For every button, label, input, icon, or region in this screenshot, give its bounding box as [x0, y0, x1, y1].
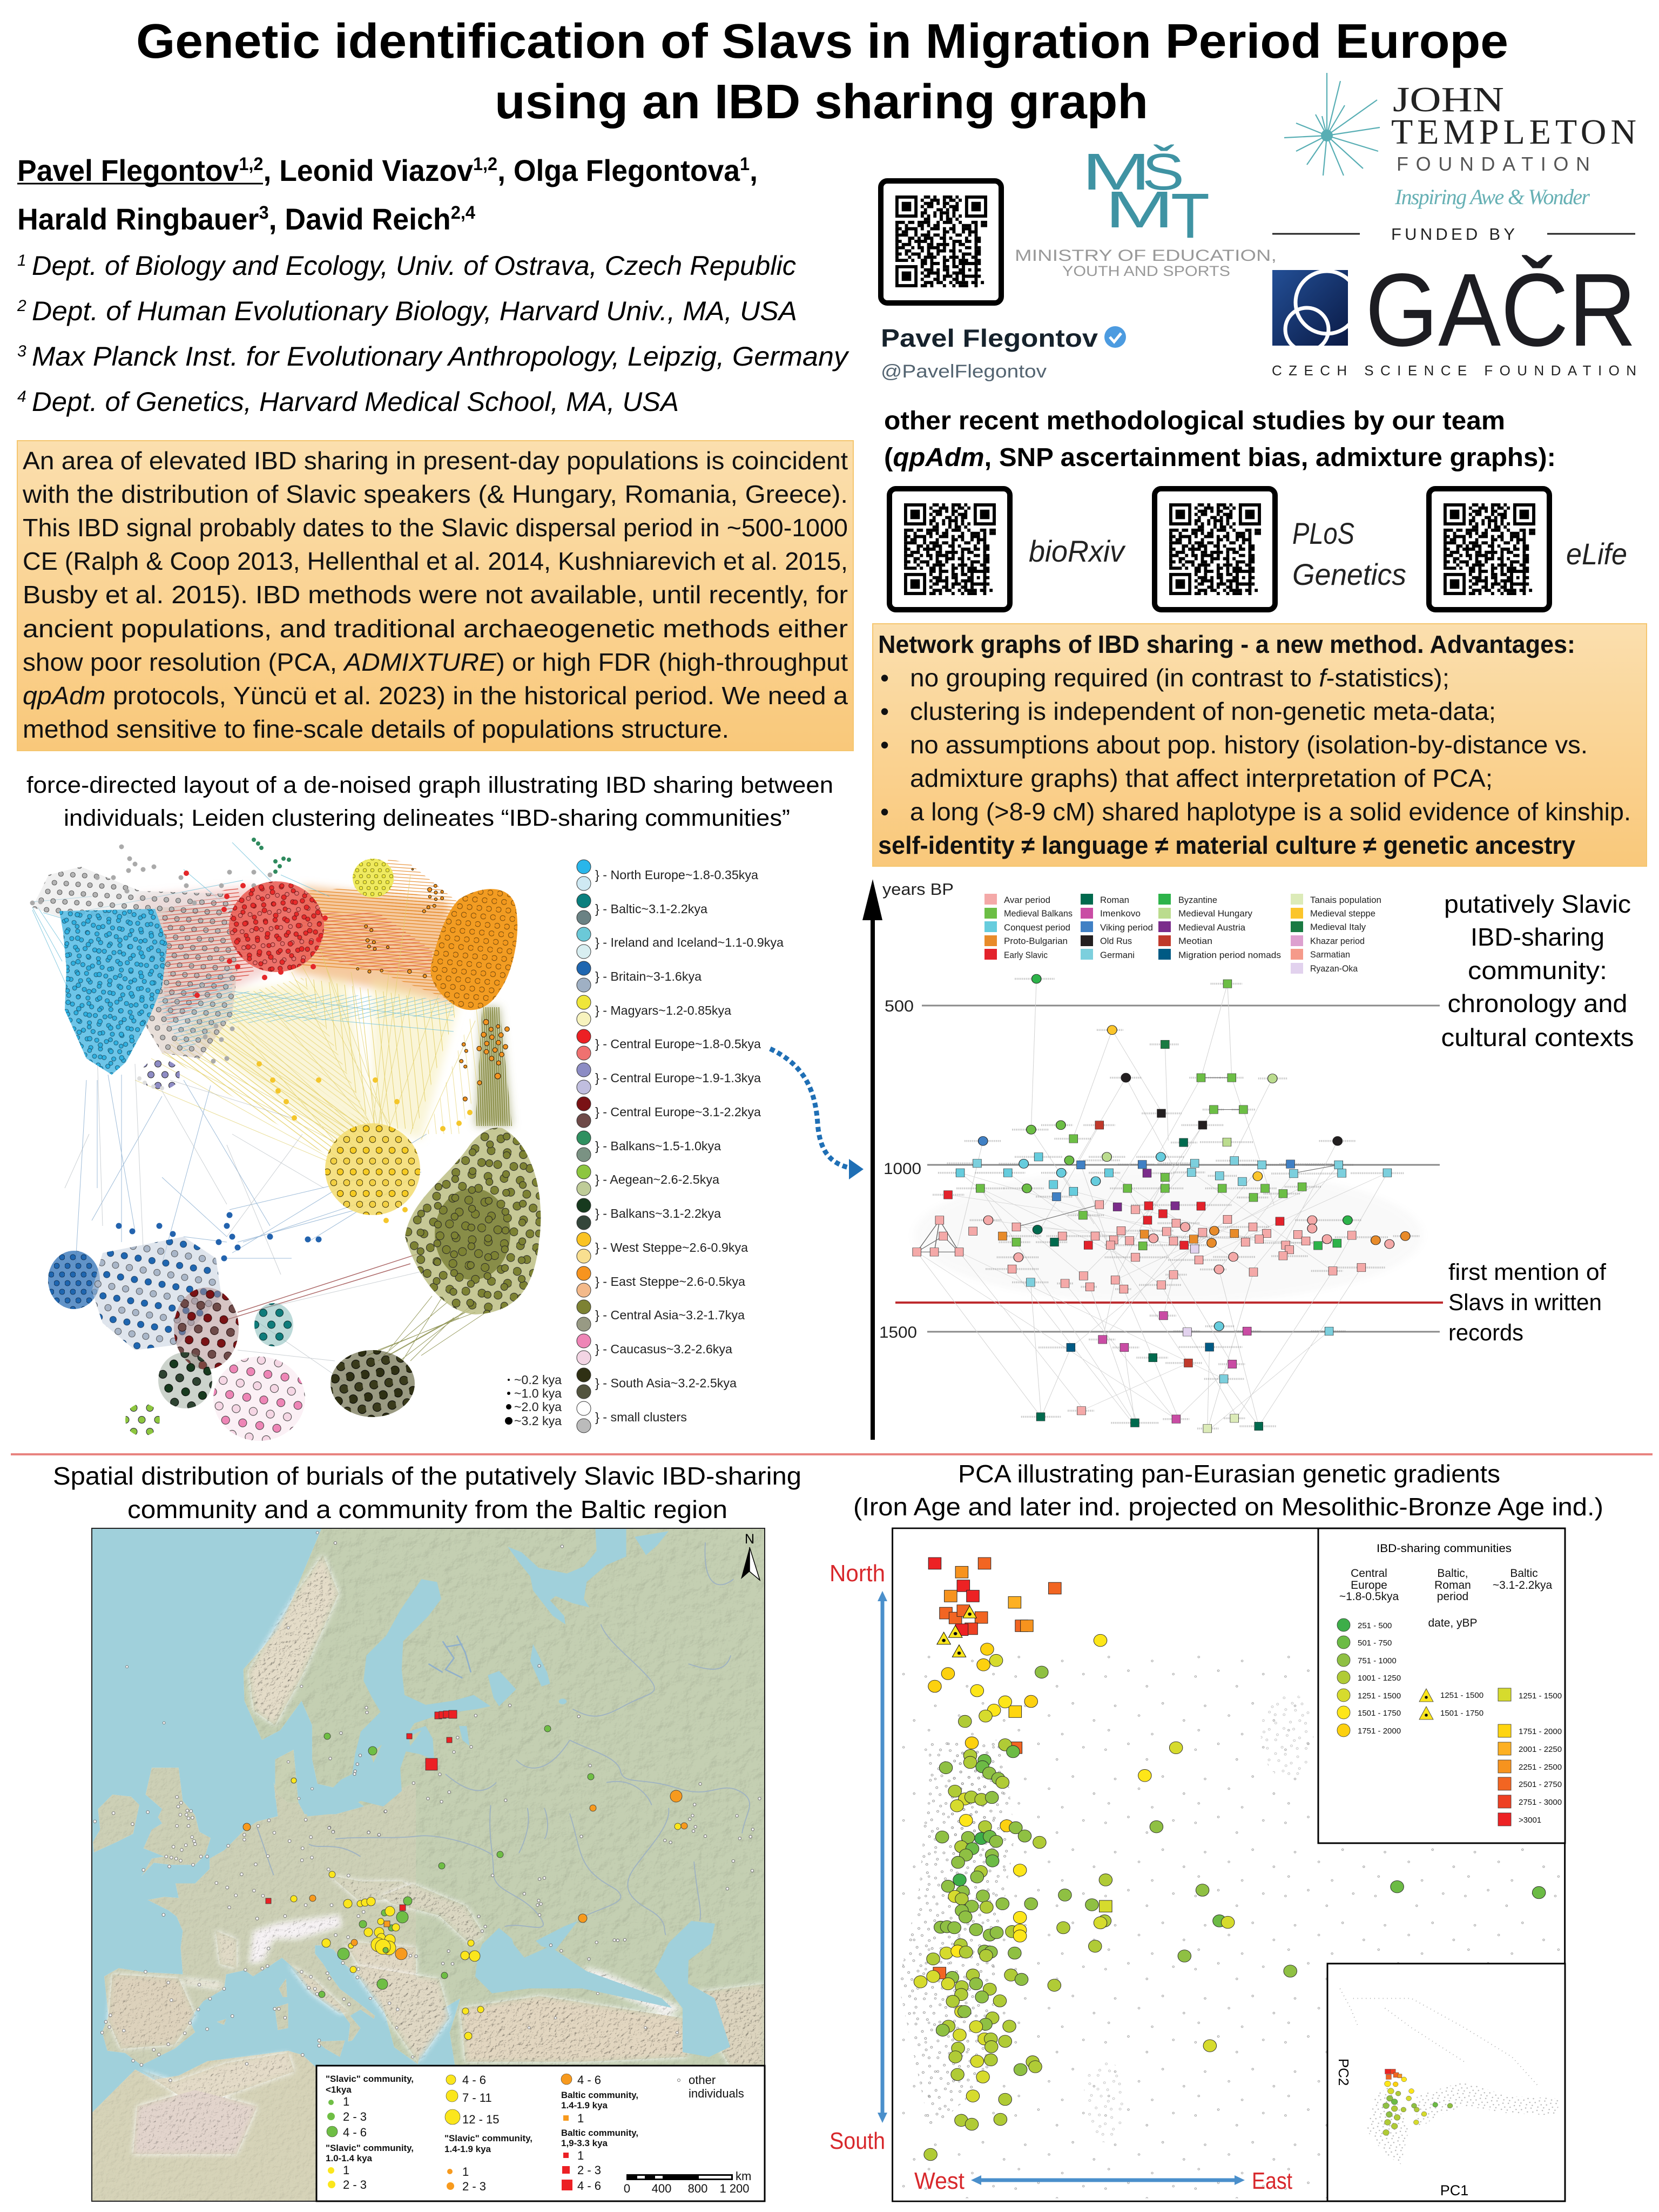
authors: [17, 153, 758, 236]
legend: PCA IBD-sharing communities: period: [1437, 1590, 1468, 1603]
map: burials in Europe: [92, 1526, 765, 2202]
community: Balkans dark green: [158, 1352, 212, 1408]
annotation: putatively Slavic community: community:: [1468, 956, 1607, 984]
authors: 3: [259, 203, 269, 223]
title: Genetic identification of Slavs in Migration Period Europe: [136, 15, 1508, 69]
chart: PCA scatter: [893, 1528, 1565, 2201]
legend: PCA IBD-sharing communities: Roman: [1434, 1579, 1471, 1591]
rivers: [335, 1542, 750, 1935]
authors: 1,2: [239, 154, 263, 174]
land: north and east Europe: [244, 1528, 765, 2066]
land: west Europe: [92, 1768, 416, 2202]
background individuals: [895, 1652, 1562, 2198]
affiliations: Max Planck Inst. for Evolutionary Anthropology, Leipzig, Germany: [32, 341, 849, 372]
authors: , David Reich: [269, 202, 451, 236]
legend: map: <1kya: [326, 2085, 352, 2095]
legend: PCA IBD-sharing communities: 1751 - 2000: [1358, 1727, 1401, 1736]
legend: map: Baltic community,: [561, 2128, 638, 2138]
twitter handle: @PavelFlegontov: [881, 361, 1047, 382]
legend: cultural contexts: Medieval Italy: [1310, 922, 1366, 932]
other studies heading: [884, 407, 1556, 472]
legend: cultural contexts: Proto-Bulgarian: [1004, 936, 1068, 946]
QR code: PLoS Genetics: PLoS: [1292, 516, 1354, 550]
logo: ministry of education: Š: [1142, 143, 1184, 201]
legend: map: km: [736, 2169, 751, 2183]
legend: cultural contexts: Tanais population: [1310, 895, 1381, 905]
legend: map: Baltic community,: [561, 2090, 638, 2100]
logo: John Templeton Foundation: Inspiring Awe & Wonder: [1394, 185, 1590, 209]
heading: force-directed layout caption: individuals; Leiden clustering delineates “IBD-sharing communities”: [64, 805, 790, 831]
legend: map: "Slavic" community,: [326, 2074, 414, 2084]
legend: IBD-sharing communities: } - East Steppe~2.6-0.5kya: [595, 1274, 745, 1289]
legend: map: 4 - 6: [577, 2073, 601, 2087]
chart: PCA inset: PC1: [1440, 2182, 1468, 2198]
title: [136, 15, 1508, 129]
community: Central Europe dark red: [174, 1287, 239, 1370]
community: Central Europe red: [186, 873, 325, 995]
community: Baltic teal: [254, 1303, 293, 1346]
community: Baltic top: [254, 840, 289, 872]
axis: years BP: 1000: [884, 1160, 921, 1178]
legend: PCA IBD-sharing communities: 1751 - 2000: [1519, 1727, 1562, 1736]
legend: IBD-sharing communities: } - Caucasus~3.2-2.6kya: [595, 1342, 732, 1356]
panel: introduction text: Busby et al. 2015). IBD methods were not available, until recently, for: [23, 581, 848, 609]
legend: IBD-sharing communities: } - Balkans~3.1-2.2kya: [595, 1206, 721, 1220]
legend: PCA IBD-sharing communities: Central: [1351, 1567, 1387, 1580]
legend: IBD-sharing communities: } - Aegean~2.6-2.5kya: [595, 1172, 719, 1186]
other individuals: west: [95, 1797, 397, 2080]
heading: PCA: PCA illustrating pan-Eurasian genetic gradients: [958, 1460, 1500, 1488]
legend: map: other: [689, 2073, 716, 2087]
legend: map: 2 - 3: [462, 2180, 486, 2193]
community: East Steppe orange: [356, 868, 517, 1101]
authors: ,: [750, 153, 758, 187]
legend: IBD-sharing communities: } - Central Europe~1.9-1.3kya: [595, 1071, 761, 1085]
legend: map: 4 - 6: [577, 2179, 601, 2193]
legend: IBD-sharing communities: } - small clusters: [595, 1410, 687, 1424]
label: East: East: [1252, 2168, 1292, 2194]
panel: network graph advantages: •: [880, 697, 889, 725]
legend: PCA IBD-sharing communities: 2501 - 2750: [1519, 1780, 1562, 1789]
logo: Czech Science Foundation: GAČR: [1365, 252, 1636, 368]
legend: map: 4 - 6: [343, 2126, 367, 2139]
legend: map: [316, 2066, 765, 2201]
chart: IBD sharing network: [32, 840, 541, 1441]
arrow: west-east: [971, 2175, 1245, 2185]
panel: introduction text: method sensitive to fine-scale details of populations structure.: [23, 715, 729, 743]
heading: spatial distribution: community and a community from the Baltic region: [127, 1495, 727, 1523]
panel: network graph advantages: self-identity ≠ language ≠ material culture ≠ genetic ancestry: [878, 831, 1575, 859]
logo: ministry of education: [1015, 143, 1277, 279]
legend: PCA IBD-sharing communities: 1001 - 1250: [1358, 1674, 1401, 1683]
legend: cultural contexts: [984, 894, 1381, 974]
legend: map: 1: [462, 2165, 469, 2179]
logo: John Templeton Foundation: [1284, 73, 1636, 209]
panel: network graph advantages: Network graphs of IBD sharing - a new method. Advantages:: [878, 630, 1575, 658]
legend: cultural contexts: Migration period nomads: [1178, 950, 1281, 960]
legend: IBD-sharing communities: } - Central Asia~3.2-1.7kya: [595, 1308, 745, 1322]
legend: PCA IBD-sharing communities: 1251 - 1500: [1440, 1691, 1483, 1700]
affiliations: 4: [17, 388, 26, 406]
title: using an IBD sharing graph: [495, 75, 1148, 129]
legend: cultural contexts: Early Slavic: [1004, 950, 1048, 960]
legend: map: 2 - 3: [577, 2163, 601, 2177]
community: grey nodes north-west: [32, 847, 281, 1061]
community: Aegean green: [125, 1404, 160, 1436]
QR code: Pavel Flegontov profile: [881, 181, 1001, 303]
legend: map: 1: [577, 2112, 584, 2125]
community: Britain dark blue: [48, 1251, 100, 1309]
logo: John Templeton Foundation: TEMPLETON: [1391, 112, 1636, 152]
heading: spatial distribution: [53, 1462, 801, 1523]
QR code: eLife: [1429, 489, 1627, 610]
legend: PCA IBD-sharing communities: 2751 - 3000: [1519, 1798, 1562, 1807]
legend: PCA IBD-sharing communities: >3001: [1519, 1816, 1541, 1825]
legend: cultural contexts: Byzantine: [1178, 895, 1217, 905]
legend: PCA IBD-sharing communities: 2251 - 2500: [1519, 1763, 1562, 1772]
affiliations: Dept. of Genetics, Harvard Medical School, MA, USA: [32, 387, 679, 417]
annotation: first mention of Slavs: records: [1448, 1320, 1523, 1346]
legend: map: 800: [688, 2182, 707, 2195]
community: North Europe: [59, 909, 167, 1075]
authors: Harald Ringbauer: [17, 202, 269, 236]
legend: PCA IBD-sharing communities: IBD-sharing communities: [1377, 1542, 1512, 1555]
legend: map: 0: [624, 2182, 630, 2195]
legend: cultural contexts: Medieval steppe: [1310, 909, 1375, 919]
legend: cultural contexts: Khazar period: [1310, 936, 1365, 946]
legend: cultural contexts: Imenkovo: [1100, 909, 1141, 919]
legend: network size key: [505, 1373, 562, 1428]
logo: Czech Science Foundation: [1272, 252, 1636, 379]
heading: PCA: (Iron Age and later ind. projected on Mesolithic-Bronze Age ind.): [853, 1493, 1603, 1521]
legend: IBD-sharing communities: } - Britain~3-1.6kya: [595, 969, 702, 983]
panel: network graph advantages: admixture graphs) that affect interpretation of PCA;: [910, 764, 1493, 792]
markers: communities: [914, 1557, 1546, 2161]
affiliations: 2: [17, 297, 26, 315]
legend: network size key: ~1.0 kya: [514, 1386, 562, 1400]
legend: map: 1,9-3.3 kya: [561, 2138, 608, 2148]
arrow: dotted link to chronology: [770, 1049, 851, 1168]
community: Central Asia olive: [405, 1128, 541, 1314]
arrow: north-south: [878, 1591, 887, 2123]
community: West Steppe gold: [259, 1064, 470, 1220]
heading: spatial distribution: Spatial distribution of burials of the putatively Slavic IBD-sharing: [53, 1462, 801, 1490]
logo: John Templeton Foundation: JOHN: [1393, 80, 1504, 119]
seas and lakes: east: [307, 1526, 730, 2057]
rivers: central Europe: [257, 1827, 361, 1875]
community: Magyars yellow: [353, 859, 394, 898]
legend: network size key: ~0.2 kya: [514, 1373, 562, 1387]
authors: , Olga Flegontova: [497, 153, 740, 187]
panel: introduction text: ancient populations, and traditional archaeogenetic methods either: [23, 615, 848, 643]
legend: map: "Slavic" community,: [326, 2143, 414, 2153]
other studies heading: (qpAdm, SNP ascertainment bias, admixture graphs):: [884, 443, 1556, 472]
annotation: first mention of Slavs: [1448, 1259, 1607, 1346]
chart: PCA inset: [1327, 1964, 1565, 2201]
logo: ministry of education: T: [1171, 180, 1210, 252]
panel: network graph advantages: clustering is independent of non-genetic meta-data;: [910, 697, 1496, 725]
other studies heading: other recent methodological studies by our team: [884, 407, 1505, 435]
legend: IBD-sharing communities: } - Central Europe~1.8-0.5kya: [595, 1037, 761, 1051]
panel: network graph advantages: [873, 624, 1647, 866]
label: North: North: [830, 1560, 885, 1587]
twitter handle: [881, 324, 1126, 382]
legend: cultural contexts: Meotian: [1178, 936, 1212, 946]
panel: network graph advantages: no assumptions about pop. history (isolation-by-distance vs.: [910, 731, 1588, 759]
panel: introduction text: [17, 441, 853, 751]
label: South: South: [830, 2128, 885, 2154]
axis: years BP: [862, 879, 1440, 1440]
legend: cultural contexts: Medieval Austria: [1178, 923, 1246, 933]
panel: network graph advantages: •: [880, 664, 889, 692]
legend: map: 1.0-1.4 kya: [326, 2153, 373, 2163]
funded by label: FUNDED BY: [1391, 225, 1515, 244]
legend: map: individuals: [689, 2087, 744, 2100]
QR code: eLife: eLife: [1566, 537, 1627, 571]
annotation: putatively Slavic community: putatively Slavic: [1444, 890, 1631, 918]
legend: cultural contexts: Conquest period: [1004, 923, 1070, 933]
panel: introduction text: An area of elevated IBD sharing in present-day populations is coincident: [23, 447, 848, 475]
legend: PCA IBD-sharing communities: 1501 - 1750: [1440, 1709, 1483, 1718]
annotation: putatively Slavic community: [1441, 890, 1634, 1051]
legend: IBD-sharing communities: } - Magyars~1.2-0.85kya: [595, 1003, 731, 1017]
annotation: first mention of Slavs: Slavs in written: [1448, 1290, 1602, 1316]
legend: PCA IBD-sharing communities: 501 - 750: [1358, 1638, 1392, 1648]
legend: PCA IBD-sharing communities: 2001 - 2250: [1519, 1745, 1562, 1754]
community: Caucasus pink: [213, 1357, 305, 1441]
legend: cultural contexts: Ryazan-Oka: [1310, 964, 1358, 974]
legend: cultural contexts: Germani: [1100, 950, 1135, 960]
legend: PCA IBD-sharing communities: [1318, 1528, 1565, 1843]
community: South Asia dark olive: [331, 1350, 415, 1417]
QR code: PLoS Genetics: [1155, 489, 1406, 610]
other individuals: north and east: [329, 1543, 759, 1964]
chart: PCA inset: PC2: [1336, 2059, 1352, 2086]
annotation: putatively Slavic community: cultural contexts: [1441, 1023, 1634, 1051]
panel: network graph advantages: •: [880, 731, 889, 759]
heading: PCA: [853, 1460, 1603, 1521]
legend: map: "Slavic" community,: [444, 2133, 532, 2143]
legend: PCA IBD-sharing communities: ~3.1-2.2kya: [1493, 1579, 1552, 1591]
legend: PCA IBD-sharing communities: 251 - 500: [1358, 1621, 1392, 1630]
legend: IBD-sharing communities: } - West Steppe~2.6-0.9kya: [595, 1240, 748, 1255]
legend: map: 2 - 3: [343, 2178, 367, 2191]
legend: IBD-sharing communities: } - Balkans~1.5-1.0kya: [595, 1139, 721, 1153]
authors: , Leonid Viazov: [263, 153, 473, 187]
panel: introduction text: CE (Ralph & Coop 2013, Hellenthal et al. 2014, Kushniarevich et al. 2015,: [23, 547, 848, 575]
map frame: [92, 1528, 765, 2201]
legend: IBD-sharing communities: [577, 860, 784, 1433]
legend: cultural contexts: Sarmatian: [1310, 950, 1350, 960]
axis: years BP: 500: [885, 997, 914, 1015]
label: West: West: [914, 2168, 965, 2194]
logo: ministry of education: M: [1082, 143, 1151, 201]
affiliations: Dept. of Biology and Ecology, Univ. of Ostrava, Czech Republic: [32, 251, 796, 281]
legend: map: 1: [577, 2149, 584, 2162]
annotation: putatively Slavic community: IBD-sharing: [1471, 923, 1604, 951]
panel: network graph advantages: no grouping required (in contrast to f-statistics);: [910, 664, 1449, 692]
heading: force-directed layout caption: [26, 772, 833, 831]
legend: PCA IBD-sharing communities: Baltic,: [1437, 1567, 1468, 1580]
authors: 2,4: [451, 203, 475, 223]
legend: map: 1.4-1.9 kya: [444, 2144, 491, 2154]
logo: ministry of education: YOUTH AND SPORTS: [1062, 263, 1230, 279]
affiliations: Dept. of Human Evolutionary Biology, Harvard Univ., MA, USA: [32, 296, 797, 326]
logo: Czech Science Foundation: CZECH SCIENCE FOUNDATION: [1272, 362, 1636, 379]
legend: cultural contexts: Medieval Hungary: [1178, 909, 1253, 919]
legend: map: 1: [343, 2163, 349, 2177]
annotation: first mention of Slavs: first mention of: [1448, 1259, 1607, 1285]
panel: introduction text: qpAdm protocols, Yüncü et al. 2023) in the historical period. We need a: [23, 682, 848, 710]
panel: network graph advantages: •: [880, 798, 889, 826]
north arrow: [741, 1532, 760, 1580]
heading: force-directed layout caption: force-directed layout of a de-noised graph illustrating IBD sharing between: [26, 772, 833, 798]
panel: introduction text: This IBD signal probably dates to the Slavic dispersal period in ~500-1000: [23, 514, 848, 542]
legend: cultural contexts: Roman: [1100, 895, 1129, 905]
legend: cultural contexts: Medieval Balkans: [1004, 909, 1073, 919]
legend: network size key: ~3.2 kya: [514, 1414, 562, 1428]
line: first mention of Slavs: [895, 1301, 1443, 1304]
QR code: bioRxiv: bioRxiv: [1029, 534, 1126, 568]
legend: cultural contexts: Avar period: [1004, 895, 1050, 905]
axis: years BP: years BP: [882, 880, 954, 899]
north arrow: N: [745, 1532, 754, 1547]
logo: ministry of education: M: [1105, 181, 1174, 239]
twitter handle: Pavel Flegontov: [881, 324, 1098, 352]
edge bands between communities: [32, 842, 512, 1382]
legend: PCA IBD-sharing communities: 1501 - 1750: [1358, 1709, 1401, 1718]
legend: PCA IBD-sharing communities: 751 - 1000: [1358, 1656, 1397, 1665]
legend: map: 12 - 15: [462, 2113, 499, 2126]
community: Britain blue-grey: [92, 1215, 319, 1350]
legend: map: 7 - 11: [462, 2091, 492, 2105]
affiliations: 1: [17, 252, 26, 269]
legend: IBD-sharing communities: } - Ireland and Iceland~1.1-0.9kya: [595, 935, 784, 949]
annotation: putatively Slavic community: chronology and: [1447, 989, 1628, 1017]
axis: years BP: 1500: [879, 1324, 917, 1341]
authors: 1,2: [473, 154, 497, 174]
legend: PCA IBD-sharing communities: 1251 - 1500: [1358, 1691, 1401, 1701]
legend: IBD-sharing communities: } - North Europe~1.8-0.35kya: [595, 868, 758, 882]
logo: ministry of education: MINISTRY OF EDUCATION,: [1015, 247, 1277, 265]
legend: IBD-sharing communities: } - Baltic~3.1-2.2kya: [595, 902, 707, 916]
affiliations: 3: [17, 342, 26, 360]
QR code: bioRxiv: [889, 489, 1126, 610]
community: Central Europe purple: [139, 1060, 180, 1090]
legend: PCA IBD-sharing communities: Baltic: [1510, 1567, 1538, 1580]
arrow head: dotted link: [849, 1159, 864, 1179]
legend: map: 4 - 6: [462, 2073, 486, 2087]
legend: map: 400: [652, 2182, 671, 2195]
affiliations: [17, 251, 849, 417]
legend: network size key: ~2.0 kya: [514, 1400, 562, 1414]
terrain: mountains: [109, 1555, 765, 2154]
legend: IBD-sharing communities: } - Central Europe~3.1-2.2kya: [595, 1105, 761, 1119]
logo: John Templeton Foundation: FOUNDATION: [1397, 153, 1590, 175]
legend: map: 1 200: [719, 2182, 750, 2195]
legend: cultural contexts: Viking period: [1100, 923, 1153, 933]
legend: map: 1: [343, 2095, 349, 2108]
chart: chronology graph of the Slavic community: [913, 974, 1422, 1433]
islands: Baltic: [370, 1730, 421, 1763]
QR code: PLoS Genetics: Genetics: [1292, 557, 1406, 591]
legend: map: 1.4-1.9 kya: [561, 2100, 608, 2110]
legend: PCA IBD-sharing communities: Europe: [1351, 1579, 1387, 1591]
other individuals: south-east and Scandinavia: [127, 1533, 677, 2057]
burial markers: [243, 1710, 687, 2040]
panel: introduction text: with the distribution of Slavic speakers (& Hungary, Romania, Greece).: [22, 480, 848, 508]
legend: cultural contexts: Old Rus: [1100, 936, 1132, 946]
authors: 1: [740, 154, 750, 174]
legend: PCA IBD-sharing communities: date, yBP: [1428, 1617, 1478, 1629]
legend: IBD-sharing communities: } - South Asia~3.2-2.5kya: [595, 1376, 737, 1390]
legend: map: 2 - 3: [343, 2110, 367, 2123]
panel: introduction text: show poor resolution (PCA, ADMIXTURE) or high FDR (high-throughput: [23, 648, 848, 676]
legend: PCA IBD-sharing communities: 1251 - 1500: [1519, 1691, 1562, 1701]
authors: Pavel Flegontov: [17, 153, 249, 187]
legend: PCA IBD-sharing communities: ~1.8-0.5kya: [1339, 1590, 1399, 1603]
panel: network graph advantages: a long (>8-9 cM) shared haplotype is a solid evidence of kinship.: [910, 798, 1631, 826]
